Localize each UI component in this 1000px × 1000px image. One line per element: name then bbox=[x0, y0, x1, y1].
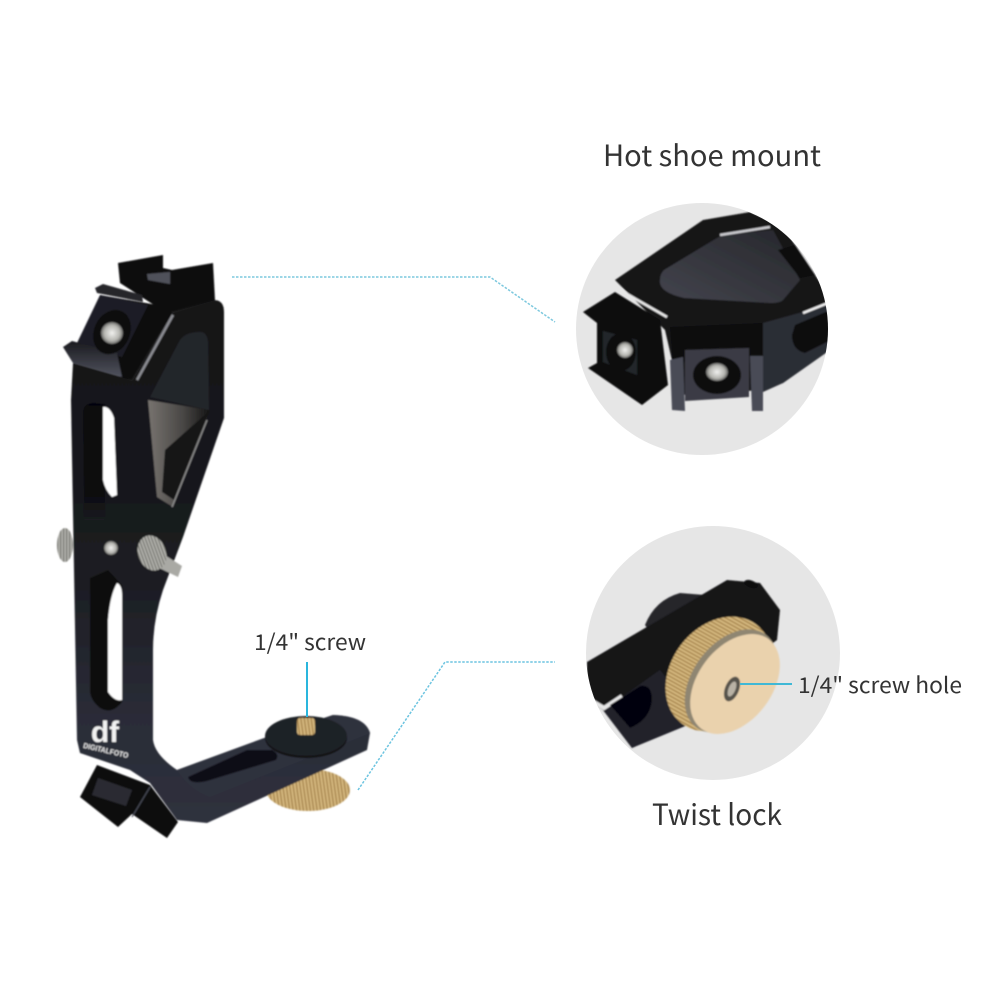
edge highlight bbox=[137, 315, 173, 380]
top rail bbox=[95, 284, 143, 302]
arm bbox=[587, 580, 780, 748]
front shoe screw bbox=[706, 363, 728, 381]
brass top face bbox=[689, 633, 780, 735]
arm lower shade bbox=[604, 670, 686, 748]
logo: DIGITALFOTO bbox=[82, 741, 129, 760]
front shoe left rail bbox=[670, 357, 685, 411]
front shoe back bbox=[670, 323, 762, 358]
brass knurled side bbox=[664, 615, 766, 732]
mounting disc bbox=[265, 716, 347, 758]
label: 1/4 screw hole: 1/4" screw hole bbox=[798, 668, 962, 700]
screw hole bbox=[723, 676, 741, 702]
lower side of plate bbox=[762, 306, 828, 393]
front shoe hole bbox=[693, 356, 741, 394]
bottom hot shoe bbox=[80, 765, 178, 838]
upper slot wall bbox=[83, 403, 105, 520]
bracket body bbox=[71, 300, 370, 823]
connector: hot shoe dotted leader bbox=[232, 277, 555, 322]
callout: 1/4 screw: 1/4" screw bbox=[254, 625, 366, 657]
logo: df bbox=[91, 716, 120, 749]
back hot shoe bbox=[118, 255, 215, 312]
infographic canvas bbox=[56, 143, 962, 839]
rear disc bbox=[644, 592, 702, 628]
plate screw bbox=[104, 541, 118, 555]
heading: hot shoe mount: Hot shoe mount bbox=[603, 133, 821, 175]
lower slot wall bbox=[90, 570, 122, 710]
brass 1/4 screw bbox=[297, 718, 315, 735]
gap sliver bbox=[587, 696, 622, 708]
window shadow bbox=[162, 412, 208, 500]
logo bbox=[82, 716, 129, 760]
plate opening bbox=[660, 230, 800, 303]
upper window: inner face bbox=[150, 332, 209, 410]
foot slot bbox=[188, 750, 277, 782]
shoe screw bbox=[101, 322, 123, 344]
upper slot opening bbox=[103, 407, 117, 497]
upper window: lower face bbox=[148, 400, 210, 507]
connector: twist lock dotted leader bbox=[358, 662, 555, 790]
dark notch bbox=[778, 245, 815, 278]
brass rim bbox=[684, 628, 774, 732]
plate body bbox=[615, 212, 840, 395]
pointer line bbox=[740, 683, 792, 685]
front shoe plate bbox=[685, 348, 749, 401]
product photo: L bracket bbox=[57, 255, 370, 838]
left shoe bbox=[583, 292, 668, 405]
screw hole inner bbox=[726, 680, 738, 698]
callout: 1/4 screw bbox=[254, 625, 366, 717]
lower rail bbox=[63, 341, 122, 377]
left shoe face bbox=[603, 331, 637, 375]
arm small hole bbox=[744, 578, 758, 588]
heading: twist lock: Twist lock bbox=[652, 792, 782, 834]
highlight right bbox=[803, 303, 828, 313]
highlights bbox=[620, 290, 667, 317]
side knob pin bbox=[155, 552, 182, 577]
front shoe right rail bbox=[750, 356, 763, 411]
side knob bbox=[133, 531, 171, 575]
edge highlight lower bbox=[172, 420, 207, 507]
lower slot opening bbox=[108, 583, 122, 700]
left shoe hole bbox=[606, 333, 636, 371]
panel: hot shoe detail circle bbox=[576, 203, 840, 455]
shoe screw recess bbox=[86, 304, 138, 360]
brass twist lock under foot bbox=[266, 769, 350, 811]
front hot shoe side bbox=[100, 295, 173, 380]
foot top surface bbox=[177, 715, 370, 797]
side slot bbox=[792, 311, 828, 353]
highlight upper bbox=[720, 227, 770, 235]
panel: twist lock detail circle bbox=[586, 526, 840, 780]
arm slot bbox=[610, 686, 652, 728]
left shoe screw bbox=[617, 342, 633, 358]
rear knob bbox=[57, 528, 73, 562]
front hot shoe face bbox=[77, 295, 148, 357]
